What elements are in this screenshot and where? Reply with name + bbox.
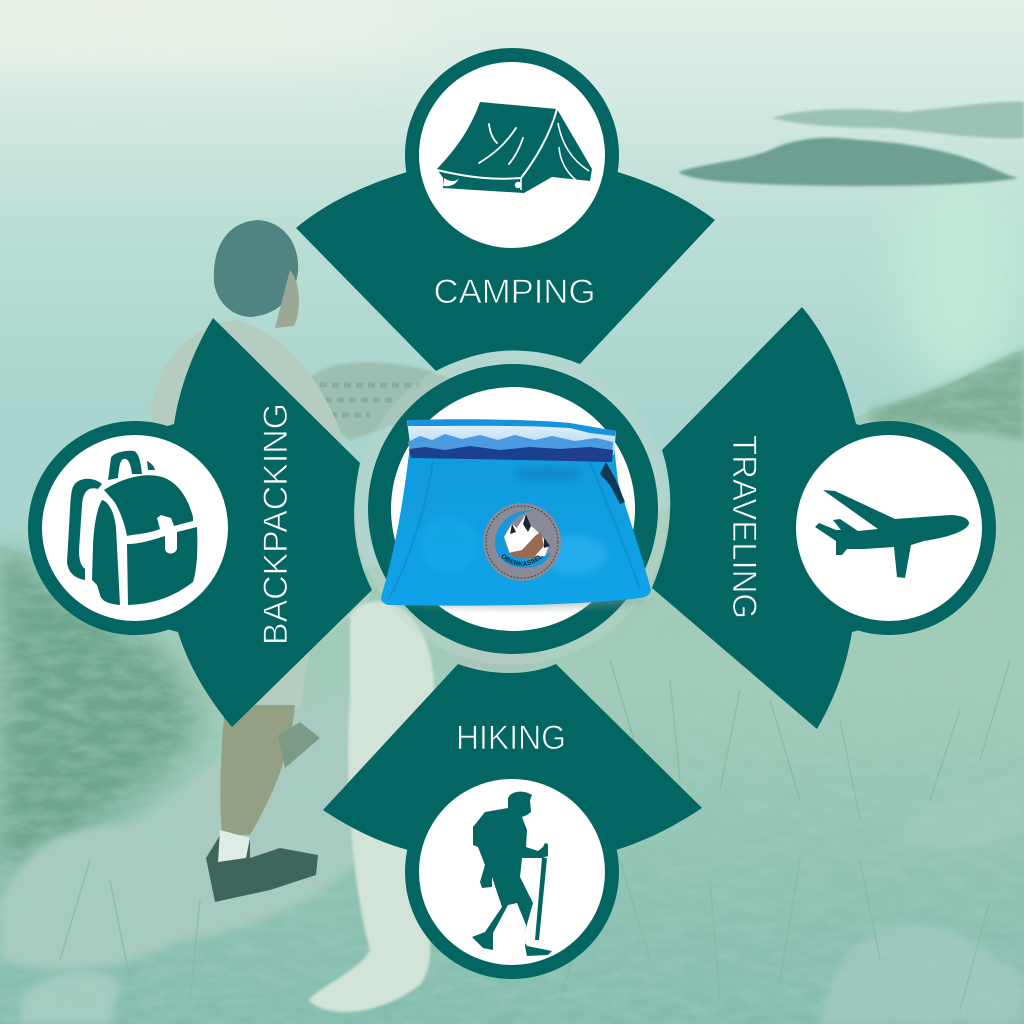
panel: hiking xyxy=(323,664,702,979)
label: traveling: TRAVELING xyxy=(725,435,763,619)
icon: tent xyxy=(437,102,592,193)
bowl: zipper xyxy=(600,462,625,504)
icon circle: tent xyxy=(419,62,605,248)
label: hiking: HIKING xyxy=(456,719,566,757)
label: camping: CAMPING xyxy=(434,273,596,311)
bowl: patterned rim xyxy=(407,419,616,462)
icon: hiker xyxy=(472,792,552,956)
patch text: OBERKASSEL xyxy=(502,554,543,566)
label: backpacking: BACKPACKING xyxy=(257,403,295,645)
background: hiker figure xyxy=(150,220,550,1012)
product: collapsible bowl xyxy=(381,419,651,612)
icon: airplane xyxy=(815,490,969,578)
panel: traveling xyxy=(652,307,996,729)
icon circle: backpack xyxy=(42,435,228,621)
centre medallion xyxy=(368,364,658,654)
icon: backpack xyxy=(67,451,197,605)
icon circle: hiker xyxy=(419,779,605,965)
panel: backpacking xyxy=(28,318,372,727)
bowl: round logo patch xyxy=(483,503,561,581)
icon circle: airplane xyxy=(796,435,982,621)
panel: camping xyxy=(296,48,715,371)
translucent ring around centre xyxy=(355,351,669,665)
